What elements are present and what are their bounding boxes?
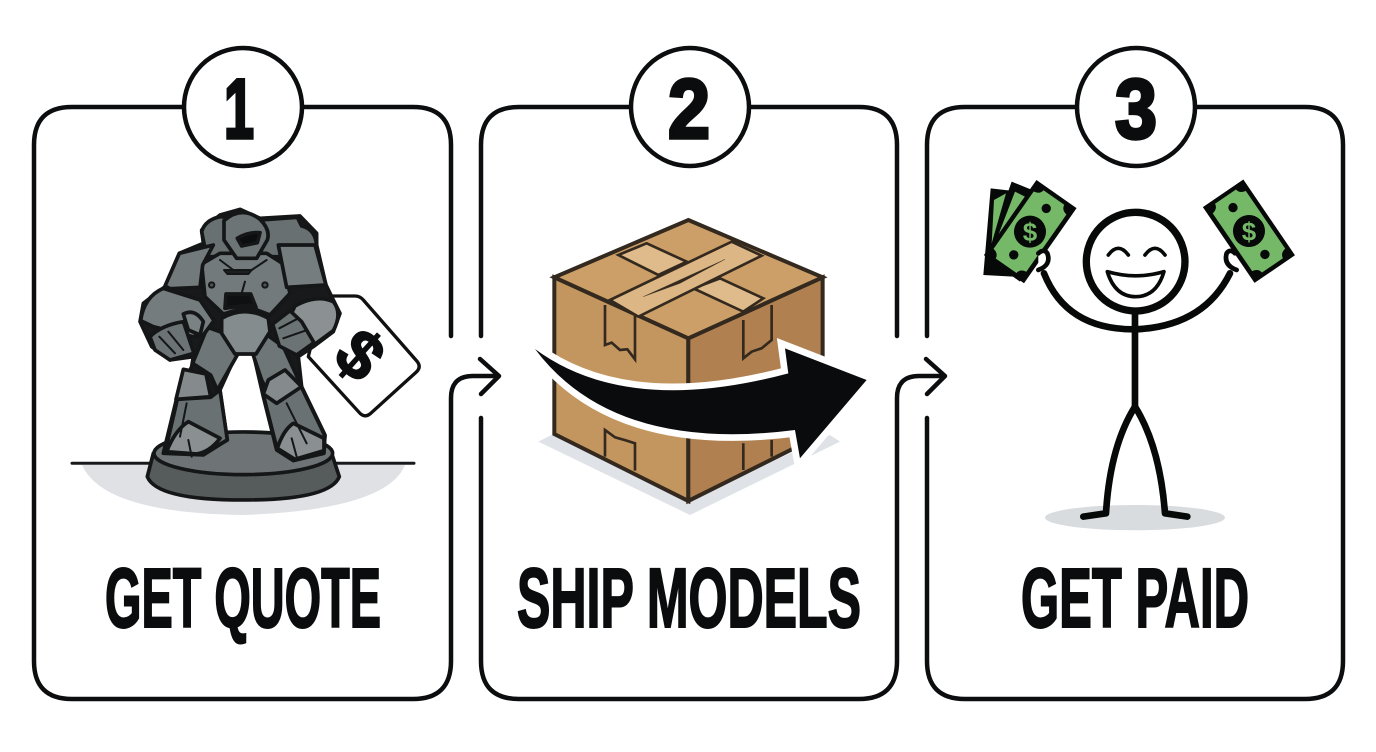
arrow head: panel 1 to 2 <box>480 359 499 394</box>
icon: happy stick figure holding cash <box>983 180 1295 530</box>
number badge 2: 2 <box>668 62 710 156</box>
panel 2 outline <box>481 107 944 699</box>
number badge 1 <box>184 48 302 166</box>
floor shadow <box>1045 505 1225 530</box>
price tag: $ <box>320 314 399 396</box>
box <box>554 220 823 501</box>
cash bill: right hand <box>1203 180 1295 283</box>
number badge 3 <box>1077 48 1195 166</box>
price tag <box>308 296 419 416</box>
label: get quote: GET QUOTE <box>105 551 381 645</box>
panel: step 1 get quote <box>34 48 498 699</box>
cash bill: right hand: $ <box>1242 216 1257 246</box>
number badge 2 <box>631 48 749 166</box>
panel: step 2 ship models <box>480 48 944 699</box>
ground shadow <box>82 465 405 515</box>
panel 1 outline <box>34 107 498 699</box>
panel: step 3 get paid <box>926 48 1343 699</box>
ground line <box>72 459 414 468</box>
number badge 1: 1 <box>224 62 254 156</box>
cash fan: left hand <box>983 180 1077 283</box>
panel 3 outline <box>927 107 1343 699</box>
icon: cardboard box with arrow <box>535 220 867 515</box>
number badge 3: 3 <box>1115 62 1157 156</box>
swoosh arrow <box>535 348 867 458</box>
cash fan: left hand: $ <box>1023 217 1038 247</box>
stick figure <box>1044 212 1230 517</box>
arrow head: panel 2 to 3 <box>926 359 945 394</box>
box shadow <box>538 433 840 515</box>
robot figure <box>140 209 340 500</box>
icon: miniature with price tag <box>72 209 419 515</box>
label: ship models: SHIP MODELS <box>517 551 861 645</box>
